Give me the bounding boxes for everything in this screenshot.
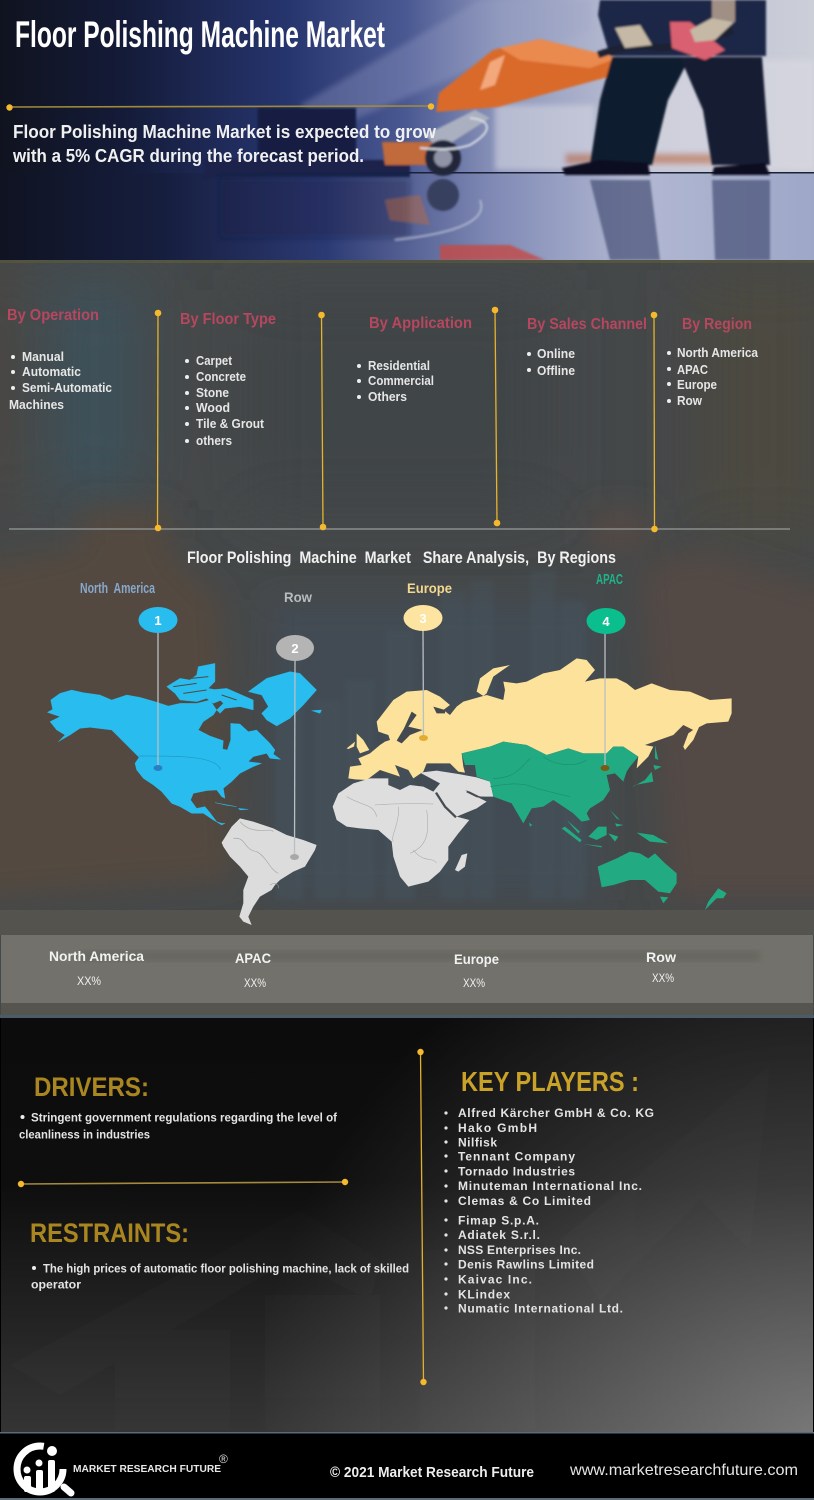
marker 4: apac pin: 4 [602, 614, 610, 629]
panel: footer [0, 1432, 814, 1500]
text: restraint item: operator [31, 1278, 81, 1292]
list: key players [444, 1106, 654, 1316]
list: applications: Others [368, 390, 407, 404]
panel: hero photo banner [0, 0, 814, 260]
gold divider with end dots [6, 103, 434, 111]
region labels: APAC [596, 571, 623, 588]
list: floor types: Concrete [196, 370, 246, 384]
list: applications: Commercial [368, 374, 434, 388]
map: europe and russia [347, 658, 732, 780]
list: key players: Alfred Kärcher GmbH & Co. KG [458, 1106, 654, 1120]
list: key players: Denis Rawlins Limited [458, 1258, 594, 1272]
stat: row: XX% [652, 971, 674, 985]
map: north america [47, 663, 322, 825]
map: south america [222, 818, 317, 925]
list: operation types: Machines [9, 398, 64, 412]
region labels: North America [80, 580, 155, 597]
list: key players: Hako GmbH [458, 1121, 537, 1135]
heading: drivers: DRIVERS: [34, 1072, 149, 1102]
list: regions: Row [677, 394, 702, 408]
heading: share analysis: Floor Polishing Machine Market Share Analysis, By Regions [187, 548, 616, 567]
stat: europe: XX% [463, 976, 485, 990]
world map [47, 658, 732, 925]
marker 2: row pin [276, 635, 314, 860]
list: key players: Minuteman International Inc. [458, 1179, 642, 1193]
list: key players: Kaivac Inc. [458, 1272, 532, 1286]
list: key players: Nilfisk [458, 1136, 497, 1150]
list: floor types [185, 354, 265, 448]
list: regions: APAC [677, 363, 708, 377]
list: operation types: Automatic [22, 365, 81, 379]
marker 4: apac pin [586, 608, 626, 771]
list: floor types: Tile & Grout [196, 417, 265, 431]
map: asia pacific [462, 742, 727, 910]
list: regions: Europe [677, 378, 717, 392]
registered mark: ® [219, 1452, 228, 1466]
stat: apac: XX% [244, 976, 266, 990]
list: key players: Numatic International Ltd. [458, 1302, 623, 1316]
panel: regional share band [1, 935, 813, 1015]
list: operation types [9, 350, 112, 412]
title: Floor Polishing Machine Market [15, 14, 385, 55]
heading: restraints: RESTRAINTS: [30, 1218, 189, 1248]
panel: drivers, restraints and key players background [0, 1015, 814, 1432]
copyright: © 2021 Market Research Future [330, 1464, 534, 1481]
gold vertical dividers and baseline [9, 307, 790, 532]
website: www.marketresearchfuture.com [569, 1462, 798, 1479]
marker 1: north america pin [138, 607, 178, 771]
stat: apac: APAC [235, 950, 271, 966]
list: floor types: Carpet [196, 354, 233, 368]
marker 3: europe pin [404, 605, 442, 741]
section: segmentation columns [7, 307, 759, 448]
stat: europe [454, 951, 499, 990]
map: africa and middle east [333, 771, 493, 887]
panel: market share background [0, 260, 814, 1015]
list: regions [667, 346, 759, 408]
icon: market research future logo [17, 1446, 71, 1493]
region labels [80, 571, 623, 605]
stat: europe: Europe [454, 951, 499, 967]
text: driver item: Stringent government regulations regarding the level of [31, 1110, 338, 1124]
gold vertical divider: key players [417, 1049, 427, 1385]
list: operation types: Manual [22, 350, 64, 364]
stat: row: Row [646, 949, 676, 965]
stat: north america [49, 948, 144, 988]
heading: by region: By Region [682, 316, 752, 333]
list: sales channels: Offline [537, 364, 575, 378]
subtitle text [12, 122, 437, 166]
list: applications [357, 359, 434, 404]
stat: row [646, 949, 676, 985]
list: key players: NSS Enterprises Inc. [458, 1243, 581, 1257]
stat: north america: North America [49, 948, 144, 964]
marker 3: europe pin: 3 [419, 611, 427, 626]
gold divider: drivers and restraints [18, 1179, 348, 1187]
list: key players: Adiatek S.r.l. [458, 1228, 540, 1242]
list: sales channels [527, 347, 575, 378]
text: restraint item: The high prices of automatic floor polishing machine, lack of skilled [43, 1262, 409, 1276]
subtitle text: Floor Polishing Machine Market is expected to grow [13, 122, 437, 142]
text: driver item [19, 1110, 338, 1142]
heading: key players: KEY PLAYERS : [461, 1066, 639, 1097]
brand name: MARKET RESEARCH FUTURE [73, 1464, 221, 1475]
list: operation types: Semi-Automatic [22, 381, 112, 395]
list: applications: Residential [368, 359, 430, 373]
marker 2: row pin: 2 [291, 641, 299, 656]
stat: north america: XX% [77, 974, 101, 988]
text: restraint item [31, 1262, 409, 1292]
list: floor types: others [196, 434, 232, 448]
heading: by operation: By Operation [7, 307, 99, 324]
list: regions: North America [677, 346, 759, 360]
marker 1: north america pin: 1 [154, 613, 162, 628]
list: key players: Fimap S.p.A. [458, 1214, 539, 1228]
list: floor types: Stone [196, 386, 229, 400]
heading: by application: By Application [369, 315, 472, 332]
list: key players: KLindex [458, 1288, 510, 1302]
text: driver item: cleanliness in industries [19, 1128, 150, 1142]
stat: apac [235, 950, 271, 990]
list: key players: Tornado Industries [458, 1164, 575, 1178]
list: sales channels: Online [537, 347, 575, 361]
list: floor types: Wood [196, 401, 230, 415]
subtitle text: with a 5% CAGR during the forecast period. [12, 146, 364, 166]
list: key players: Clemas & Co Limited [458, 1194, 591, 1208]
heading: by floor type: By Floor Type [180, 311, 276, 328]
list: key players: Tennant Company [458, 1150, 575, 1164]
region labels: Europe [407, 580, 452, 596]
heading: by sales channel: By Sales Channel [527, 316, 647, 333]
region labels: Row [284, 589, 312, 605]
